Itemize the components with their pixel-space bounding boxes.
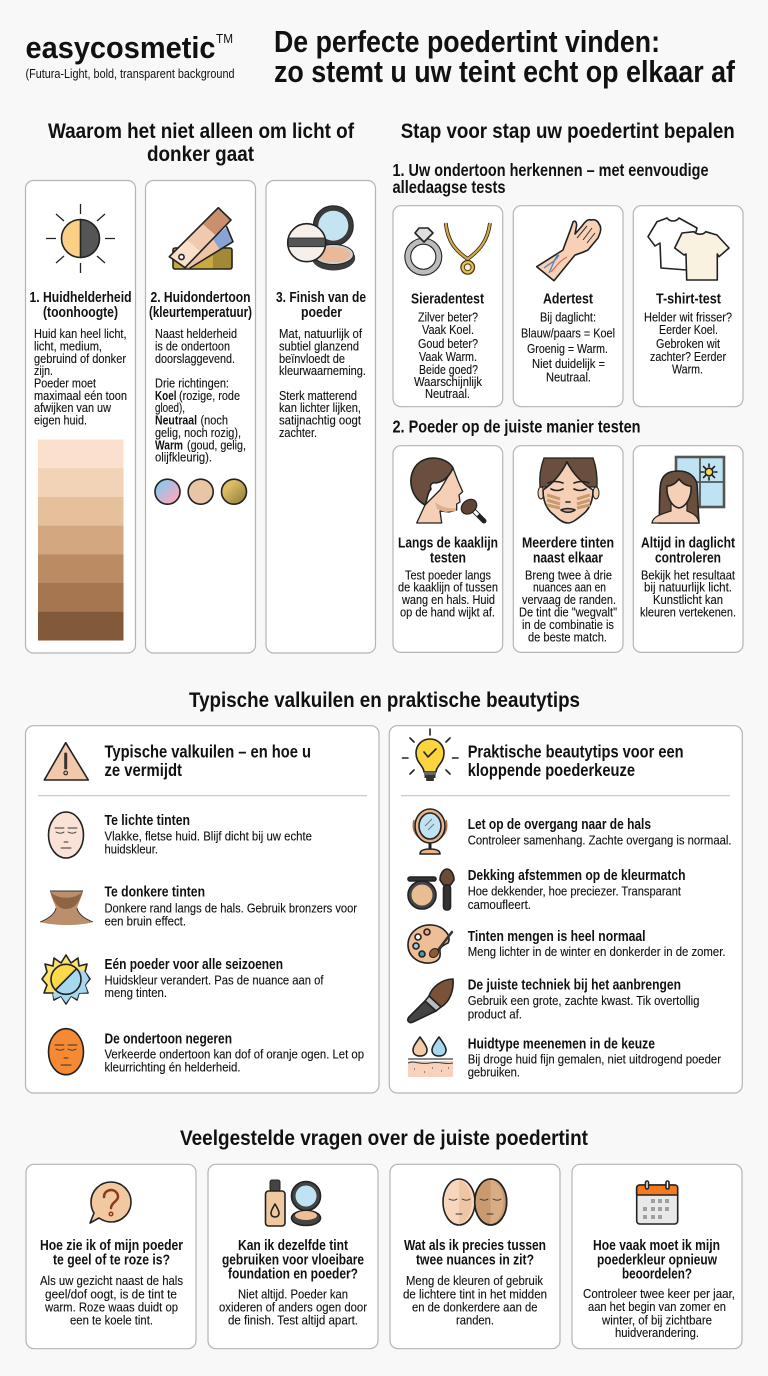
text block: Dekking afstemmen op de kleurmatch bbox=[468, 867, 686, 884]
heading bbox=[149, 289, 252, 321]
panel: meerdere tinten bbox=[513, 446, 623, 652]
text block bbox=[519, 567, 617, 644]
icon: orange face bbox=[48, 1029, 84, 1075]
icon: sun seasons bbox=[42, 955, 90, 1004]
text block bbox=[468, 867, 686, 912]
text block: Beide goed? bbox=[419, 362, 478, 377]
text block: wang en hals. Huid bbox=[401, 592, 495, 607]
icon: neck bbox=[40, 891, 93, 925]
text block: Gebruik een grote, zachte kwast. Tik overtollig bbox=[468, 993, 700, 1008]
text block: Let op de overgang naar de hals bbox=[468, 816, 651, 833]
text block: Waarschijnlijk bbox=[414, 374, 482, 389]
text block: zijn. bbox=[34, 363, 53, 378]
text block: Verkeerde ondertoon kan dof of oranje ogen. Let op bbox=[104, 1046, 364, 1061]
heading: 1. Huidhelderheid bbox=[30, 289, 132, 306]
text block bbox=[34, 326, 127, 428]
text block: maximaal eén toon bbox=[34, 388, 127, 403]
item: te donkere tinten bbox=[40, 884, 357, 928]
text block: De juiste techniek bij het aanbrengen bbox=[468, 976, 681, 993]
logo: easycosmetic: easycosmetic bbox=[26, 30, 216, 65]
text block: Niet altijd. Poeder kan bbox=[238, 1286, 348, 1301]
subheading: ondertoon bbox=[392, 160, 709, 197]
text block: Bekijk het resultaat bbox=[641, 567, 735, 582]
text block bbox=[219, 1286, 367, 1327]
icon: compact and brush bbox=[408, 869, 454, 910]
text block: nuances aan en bbox=[533, 580, 606, 595]
heading: 2. Huidondertoon bbox=[150, 289, 250, 306]
text block: Gebroken wit bbox=[656, 336, 720, 351]
text block: Vaak Koel. bbox=[422, 322, 474, 337]
heading bbox=[641, 534, 735, 566]
panel: kaaklijn bbox=[393, 446, 503, 652]
text block: warm. Roze waas duidt op bbox=[44, 1300, 178, 1315]
heading: Langs de kaaklijn bbox=[398, 534, 498, 551]
icon: question bubble bbox=[90, 1182, 131, 1223]
icon: woman at window bbox=[652, 457, 724, 523]
panel: typische valkuilen bbox=[26, 726, 379, 1093]
heading: te geel of te roze is? bbox=[53, 1251, 170, 1268]
text block: Blauw/paars = Koel bbox=[521, 326, 615, 341]
panel: huidondertoon bbox=[146, 180, 256, 653]
item: ondertoon negeren bbox=[48, 1029, 364, 1075]
item: dekking bbox=[408, 867, 686, 912]
panel: faq 2 bbox=[208, 1164, 378, 1349]
text block: Koel bbox=[155, 388, 176, 403]
text block: Goud beter? bbox=[418, 336, 478, 351]
text block bbox=[468, 1035, 721, 1080]
text block: Vaak Warm. bbox=[419, 349, 477, 364]
text block: Drie richtingen: bbox=[155, 376, 229, 390]
heading: Wat als ik precies tussen bbox=[404, 1237, 546, 1254]
heading: testen bbox=[430, 549, 466, 566]
text block: olijfkleurig). bbox=[155, 450, 212, 465]
panel: faq 3 bbox=[390, 1164, 560, 1349]
text block: afwijken van uw bbox=[34, 400, 111, 415]
heading bbox=[522, 534, 614, 566]
heading bbox=[104, 742, 311, 780]
text block: Vlakke, fletse huid. Blijf dicht bij uw echte bbox=[104, 829, 312, 844]
text block: Neutraal. bbox=[425, 386, 470, 401]
panel: t-shirt-test bbox=[633, 206, 743, 407]
heading bbox=[276, 289, 366, 321]
heading: Typische valkuilen – en hoe u bbox=[104, 742, 311, 762]
text block: zachter. bbox=[279, 425, 317, 440]
text block: doorslaggevend. bbox=[155, 351, 235, 366]
icon: two faces bbox=[443, 1179, 507, 1225]
heading: waarom: Waarom het niet alleen om licht of bbox=[48, 119, 355, 143]
heading: kloppende poederkeuze bbox=[468, 760, 635, 780]
text block: gelig, noch rozig), bbox=[155, 425, 241, 440]
text block: huidverandering. bbox=[615, 1325, 699, 1340]
text block: (rozige, rode bbox=[179, 388, 240, 403]
heading bbox=[398, 534, 498, 566]
title: De perfecte poedertint vinden: bbox=[274, 24, 660, 59]
text block: satijnachtig oogt bbox=[279, 413, 361, 428]
text block: De ondertoon negeren bbox=[104, 1030, 232, 1047]
icon: t-shirts bbox=[648, 218, 729, 280]
text block: Niet duidelijk = bbox=[532, 356, 605, 371]
text block: Groenig = Warm. bbox=[527, 341, 608, 356]
panel: adertest bbox=[513, 206, 623, 407]
text block: geel/dof oogt, is de tint te bbox=[45, 1286, 177, 1301]
icon: ring and necklace bbox=[408, 223, 490, 274]
text block: gloed), bbox=[155, 400, 185, 415]
icon: compact and puff bbox=[288, 206, 355, 270]
heading bbox=[222, 1237, 364, 1282]
text block: vervaag de randen. bbox=[522, 592, 616, 607]
text block: gebruind of donker bbox=[34, 351, 126, 366]
panel: faq 1 bbox=[26, 1164, 196, 1349]
text block: is de ondertoon bbox=[155, 338, 230, 353]
panel: beautytips bbox=[389, 726, 742, 1093]
item: seizoenen bbox=[42, 955, 324, 1004]
icon: light bulb bbox=[402, 729, 458, 781]
text block: en de donkerdere aan de bbox=[412, 1300, 538, 1315]
heading: Altijd in daglicht bbox=[641, 534, 735, 551]
heading: Hoe zie ik of mijn poeder bbox=[40, 1237, 183, 1254]
text block: Eerder Koel. bbox=[659, 322, 718, 337]
text block: (goud, gelig, bbox=[187, 437, 246, 452]
text block: Te lichte tinten bbox=[104, 812, 190, 829]
icon: calendar bbox=[637, 1181, 678, 1224]
icon: half sun bbox=[46, 204, 115, 273]
heading: (kleurtemperatuur) bbox=[149, 304, 252, 321]
text block: de beste match. bbox=[528, 630, 607, 644]
text block: randen. bbox=[456, 1312, 494, 1327]
text block bbox=[640, 567, 736, 620]
text block: Tinten mengen is heel normaal bbox=[468, 928, 646, 945]
text block: licht, medium, bbox=[34, 338, 102, 353]
text block: Huid kan heel licht, bbox=[34, 326, 126, 341]
heading: ze vermijdt bbox=[104, 760, 182, 780]
text block: Naast helderheid bbox=[155, 326, 237, 341]
text block: Poeder moet bbox=[34, 376, 96, 390]
text block bbox=[104, 884, 357, 928]
text block: Kunstlicht kan bbox=[653, 592, 723, 607]
text block: Bij daglicht: bbox=[540, 310, 596, 325]
text block: Huidskleur verandert. Pas de nuance aan of bbox=[104, 972, 324, 987]
heading: waarom bbox=[48, 119, 355, 166]
icon: warning triangle bbox=[44, 743, 88, 780]
heading: poeder bbox=[301, 304, 342, 321]
text block: camoufleert. bbox=[468, 897, 531, 912]
icon: big brush bbox=[408, 979, 453, 1023]
text block bbox=[583, 1286, 735, 1340]
panel: faq 4 bbox=[572, 1164, 742, 1349]
text block: de lichtere tint in het midden bbox=[403, 1286, 547, 1301]
heading: (toonhoogte) bbox=[43, 304, 118, 321]
text block: in de combinatie is bbox=[522, 617, 614, 632]
logo: easycosmetic: TM bbox=[216, 31, 233, 46]
text block bbox=[104, 1030, 364, 1075]
text block: winter, of bij zichtbare bbox=[601, 1312, 712, 1327]
text block bbox=[398, 567, 498, 620]
text block: aan het begin van zomer en bbox=[588, 1299, 726, 1314]
text block: Neutraal bbox=[155, 413, 197, 428]
text block: Bij droge huid fijn gemalen, niet uitdrogend poeder bbox=[468, 1051, 721, 1066]
text block: Donkere rand langs de hals. Gebruik bronzers voor bbox=[104, 901, 357, 916]
text block: Meng lichter in de winter en donkerder in de zomer. bbox=[468, 944, 726, 959]
title bbox=[274, 24, 736, 89]
icon: drops and skin bbox=[408, 1037, 453, 1077]
text block: bij natuurlijk licht. bbox=[644, 580, 732, 595]
heading: Adertest bbox=[543, 290, 593, 308]
subheading: ondertoon: alledaagse tests bbox=[392, 177, 506, 197]
text block: kleurrichting én helderheid. bbox=[104, 1060, 240, 1075]
text block: Breng twee à drie bbox=[525, 567, 612, 582]
logo: easycosmetic: (Futura-Light, bold, transparent background bbox=[26, 67, 235, 81]
heading: poederkleur opnieuw bbox=[597, 1251, 717, 1268]
icon: undertone circles bbox=[155, 479, 246, 504]
text block: (noch bbox=[200, 413, 228, 428]
text block bbox=[104, 956, 324, 1000]
text block: Eén poeder voor alle seizoenen bbox=[104, 956, 283, 973]
text block: Warm. bbox=[672, 362, 703, 376]
icon: face with swatches bbox=[538, 458, 599, 523]
text block: Sterk matterend bbox=[279, 388, 357, 403]
text block: Mat, natuurlijk of bbox=[279, 326, 362, 341]
text block: meng tinten. bbox=[104, 985, 167, 1000]
text block: kan lichter lijken, bbox=[279, 400, 361, 415]
text block bbox=[403, 1273, 547, 1327]
item: overgang bbox=[413, 809, 732, 854]
icon: foundation and compact bbox=[266, 1180, 320, 1226]
text block bbox=[155, 326, 246, 465]
heading bbox=[468, 742, 684, 780]
text block: Meng de kleuren of gebruik bbox=[406, 1273, 543, 1288]
heading: 3. Finish van de bbox=[276, 289, 366, 306]
heading: Sieradentest bbox=[411, 290, 484, 308]
text block: Controleer twee keer per jaar, bbox=[583, 1286, 735, 1301]
text block: Hoe dekkender, hoe preciezer. Transparant bbox=[468, 884, 681, 899]
text block bbox=[468, 976, 700, 1021]
icon: profile with brush bbox=[411, 458, 484, 523]
text block: kleurwaarneming. bbox=[279, 363, 366, 378]
text block bbox=[104, 812, 312, 856]
heading bbox=[404, 1237, 546, 1268]
icon: hand with veins bbox=[537, 220, 601, 281]
text block: Test poeder langs bbox=[405, 567, 491, 582]
text block: Neutraal. bbox=[546, 370, 591, 385]
heading: naast elkaar bbox=[533, 549, 603, 566]
subheading: poeder testen: 2. Poeder op de juiste manier testen bbox=[392, 417, 640, 437]
heading: foundation en poeder? bbox=[228, 1265, 358, 1282]
text block: oxideren of anders ogen door bbox=[219, 1300, 367, 1315]
item: techniek bbox=[408, 976, 700, 1023]
text block: kleuren vertekenen. bbox=[640, 605, 736, 620]
icon: palette bbox=[408, 925, 452, 963]
text block bbox=[279, 326, 366, 440]
text block: beïnvloedt de bbox=[279, 351, 345, 366]
text block bbox=[414, 310, 482, 401]
panel: daglicht bbox=[633, 446, 743, 652]
panel: sieradentest bbox=[393, 206, 503, 407]
text block: Zilver beter? bbox=[418, 310, 478, 325]
text block: een bruin effect. bbox=[104, 913, 186, 928]
text block: product af. bbox=[468, 1006, 522, 1021]
text block bbox=[468, 928, 726, 959]
text block bbox=[521, 310, 615, 385]
heading bbox=[593, 1237, 720, 1282]
text block bbox=[40, 1273, 183, 1327]
text block: een te koele tint. bbox=[70, 1312, 153, 1327]
item: mengen bbox=[408, 925, 726, 963]
text block: Te donkere tinten bbox=[104, 884, 205, 901]
item: huidtype bbox=[408, 1035, 721, 1080]
text block: Als uw gezicht naast de hals bbox=[40, 1273, 183, 1288]
text block: Warm bbox=[155, 437, 183, 452]
icon: colour swatch fan bbox=[169, 208, 233, 269]
text block: De tint die "wegvalt" bbox=[519, 605, 617, 620]
heading bbox=[30, 289, 132, 321]
heading: waarom: donker gaat bbox=[147, 142, 254, 166]
text block: Huidtype meenemen in de keuze bbox=[468, 1035, 655, 1052]
heading: gebruiken voor vloeibare bbox=[222, 1251, 364, 1268]
text block bbox=[468, 816, 732, 847]
heading: controleren bbox=[655, 549, 721, 566]
text block: zachter? Eerder bbox=[650, 349, 726, 364]
panel: huidhelderheid bbox=[26, 180, 136, 653]
heading: Praktische beautytips voor een bbox=[468, 742, 684, 762]
heading: Meerdere tinten bbox=[522, 534, 614, 551]
icon: mirror bbox=[413, 809, 447, 854]
text block: op de hand wijkt af. bbox=[400, 605, 495, 620]
text block: huidskleur. bbox=[104, 842, 158, 856]
text block: de finish. Test altijd apart. bbox=[228, 1312, 358, 1327]
chart: skin tone scale bbox=[38, 440, 124, 640]
text block: Helder wit frisser? bbox=[644, 310, 732, 325]
logo: easycosmetic bbox=[26, 30, 235, 81]
heading: beoordelen? bbox=[622, 1265, 692, 1282]
heading: valkuilen en tips: Typische valkuilen en praktische beautytips bbox=[189, 688, 580, 712]
heading: T-shirt-test bbox=[656, 290, 721, 308]
heading bbox=[40, 1237, 183, 1268]
heading: twee nuances in zit? bbox=[416, 1251, 534, 1268]
text block: de kaaklijn of tussen bbox=[398, 580, 498, 595]
text block: gebruiken. bbox=[468, 1065, 520, 1080]
heading: Kan ik dezelfde tint bbox=[238, 1237, 348, 1254]
text block: subtiel glanzend bbox=[279, 338, 359, 353]
item: te lichte tinten bbox=[48, 812, 312, 858]
text block: eigen huid. bbox=[34, 413, 87, 428]
icon: pale face bbox=[48, 812, 84, 858]
heading: Hoe vaak moet ik mijn bbox=[593, 1237, 720, 1254]
heading: veelgestelde vragen: Veelgestelde vragen over de juiste poedertint bbox=[180, 1126, 588, 1150]
text block bbox=[644, 310, 732, 376]
panel: finish bbox=[266, 180, 376, 653]
